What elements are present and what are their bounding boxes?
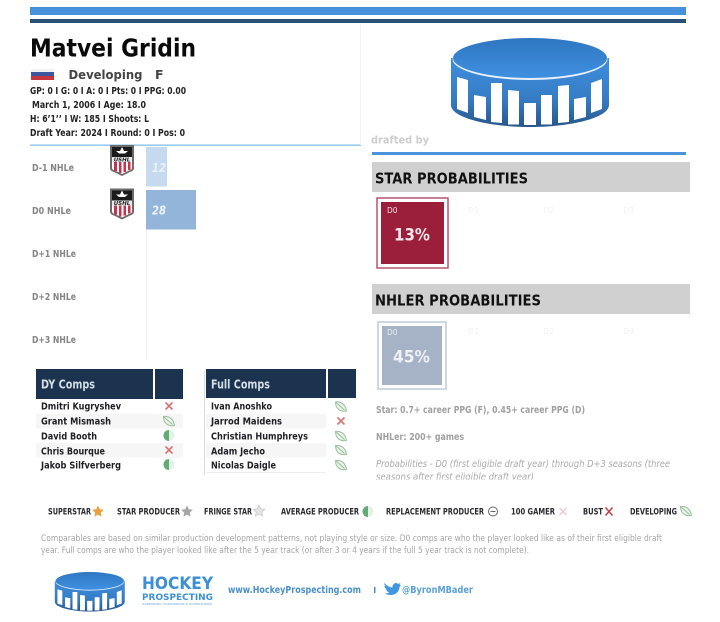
legend: AVERAGE PRODUCER <box>281 508 359 518</box>
panel: NHLer probabilities: D1 <box>468 327 479 336</box>
names: Christian Humphreys <box>211 432 308 442</box>
bar: D-1 NHLe 12: 12 <box>152 161 166 175</box>
player stats lines <box>30 86 186 139</box>
names: Dmitri Kugryshev <box>41 402 121 412</box>
season labels: D-1 NHLe <box>32 163 74 174</box>
card: D0 45%: 45% <box>393 348 430 366</box>
player stats lines: Draft Year: 2024 I Round: 0 I Pos: 0 <box>30 128 185 139</box>
player name title: Matvei Gridin <box>30 34 196 62</box>
bar: D0 NHLe 28 <box>146 190 196 230</box>
icon: small puck logo <box>55 572 125 611</box>
icon: Russian flag <box>31 69 54 80</box>
definitions text: Probabilities - D0 (first eligible draft year) through D+3 seasons (three <box>376 459 670 470</box>
icon: twitter bird <box>384 583 401 595</box>
top accent bars <box>30 7 686 23</box>
Hockey Prospecting wordmark: ASSESSING TOMORROW'S SUPERSTARS <box>142 602 212 606</box>
season labels: D0 NHLe <box>32 206 71 217</box>
heading: STAR PROBABILITIES <box>375 170 528 188</box>
player stats lines: March 1, 2006 I Age: 18.0 <box>32 100 146 111</box>
footnote text: Comparables are based on similar production development patterns, not playing style or size. D0 comps are who the player looked like as of their first eligible draft <box>41 534 663 544</box>
header <box>206 369 356 398</box>
Hockey Prospecting wordmark: HOCKEY <box>142 574 214 594</box>
names: Jarrod Maidens <box>210 416 282 428</box>
legend: BUST <box>583 508 603 518</box>
names: Nicolas Daigle <box>211 460 276 472</box>
legend: FRINGE STAR <box>204 508 252 518</box>
legend: DEVELOPING <box>630 508 677 518</box>
card: D0 13%: D0 <box>387 206 398 215</box>
header <box>36 369 183 399</box>
icon: star producer <box>181 506 193 517</box>
names: Jakob Silfverberg <box>40 460 121 472</box>
names: Chris Bourque <box>41 446 105 458</box>
season labels: D+2 NHLe <box>32 292 76 303</box>
season labels: D+1 NHLe <box>32 249 76 260</box>
chart: NHLe by season <box>32 145 196 360</box>
panel: star probabilities <box>372 162 690 268</box>
footnote text <box>41 534 663 556</box>
footnote text: year. Full comps are who the player looked like after the 5 year track (or after 3 or 4 years if the full 5 year track is not complete). <box>41 546 529 556</box>
panel: NHLer probabilities <box>372 284 690 483</box>
drafted by label: drafted by <box>371 134 429 146</box>
heading <box>372 284 690 314</box>
names: David Booth <box>41 432 97 442</box>
panel: NHLer probabilities: D2 <box>543 327 554 336</box>
status and position: Developing <box>68 67 142 82</box>
icon: superstar <box>92 506 104 517</box>
definitions text: Star: 0.7+ career PPG (F), 0.45+ career PPG (D) <box>376 405 585 416</box>
definitions text <box>376 405 670 483</box>
footer branding <box>55 572 473 611</box>
twitter handle: @ByronMBader <box>402 585 473 596</box>
player stats lines: H: 6’1’’ I W: 185 I Shoots: L <box>30 114 149 125</box>
icon: fringe star <box>253 505 265 516</box>
names <box>210 402 308 472</box>
player stats lines: GP: 0 I G: 0 I A: 0 I Pts: 0 I PPG: 0.00 <box>30 86 186 97</box>
bar: D0 NHLe 28: 28 <box>152 204 166 218</box>
icon: 100 gamer <box>560 508 566 515</box>
definitions text: NHLer: 200+ games <box>376 432 464 443</box>
legend: SUPERSTAR <box>48 508 91 518</box>
Hockey Prospecting wordmark: PROSPECTING <box>142 593 213 603</box>
panel: star probabilities: D1 <box>468 206 479 215</box>
icon: bust <box>606 508 612 516</box>
bar: D-1 NHLe 12 <box>146 147 167 186</box>
icon: hockey puck logo <box>451 38 609 127</box>
table: DY comps <box>36 369 183 472</box>
Hockey Prospecting wordmark <box>142 574 214 606</box>
outcome icons <box>336 402 346 470</box>
panel: player info <box>30 67 186 139</box>
outcome icons <box>164 402 174 470</box>
season labels <box>32 163 76 346</box>
icon: USHL logo D0 <box>110 188 134 220</box>
panel: NHLer probabilities: D3 <box>623 327 634 336</box>
legend: REPLACEMENT PRODUCER <box>386 508 484 518</box>
table: full comps <box>204 369 356 475</box>
heading: NHLER PROBABILITIES <box>375 292 541 310</box>
names: Adam Jecho <box>211 446 265 458</box>
card: D0 13% <box>377 198 448 268</box>
names: Grant Mismash <box>41 416 111 428</box>
names: Ivan Anoshko <box>211 402 272 412</box>
header: DY Comps <box>41 378 95 392</box>
card: D0 45%: D0 <box>387 328 398 337</box>
legend: STAR PRODUCER <box>117 508 180 518</box>
icon: developing <box>680 506 692 516</box>
icon: replacement producer <box>488 507 498 516</box>
panel: star probabilities: D3 <box>623 206 634 215</box>
heading <box>372 162 690 192</box>
definitions text: seasons after first eligible draft year) <box>376 472 534 483</box>
icon: average producer <box>362 506 374 517</box>
season labels: D+3 NHLe <box>32 335 76 346</box>
card: D0 13%: 13% <box>394 226 430 244</box>
website: www.HockeyProspecting.com <box>228 585 361 596</box>
legend: 100 GAMER <box>511 508 555 518</box>
icon: USHL logo D-1 <box>110 145 134 176</box>
header: Full Comps <box>211 378 270 392</box>
legend <box>48 505 692 518</box>
names <box>40 402 121 472</box>
status and position: F <box>155 67 164 82</box>
card: D0 45% <box>378 322 446 389</box>
panel: star probabilities: D2 <box>543 206 554 215</box>
